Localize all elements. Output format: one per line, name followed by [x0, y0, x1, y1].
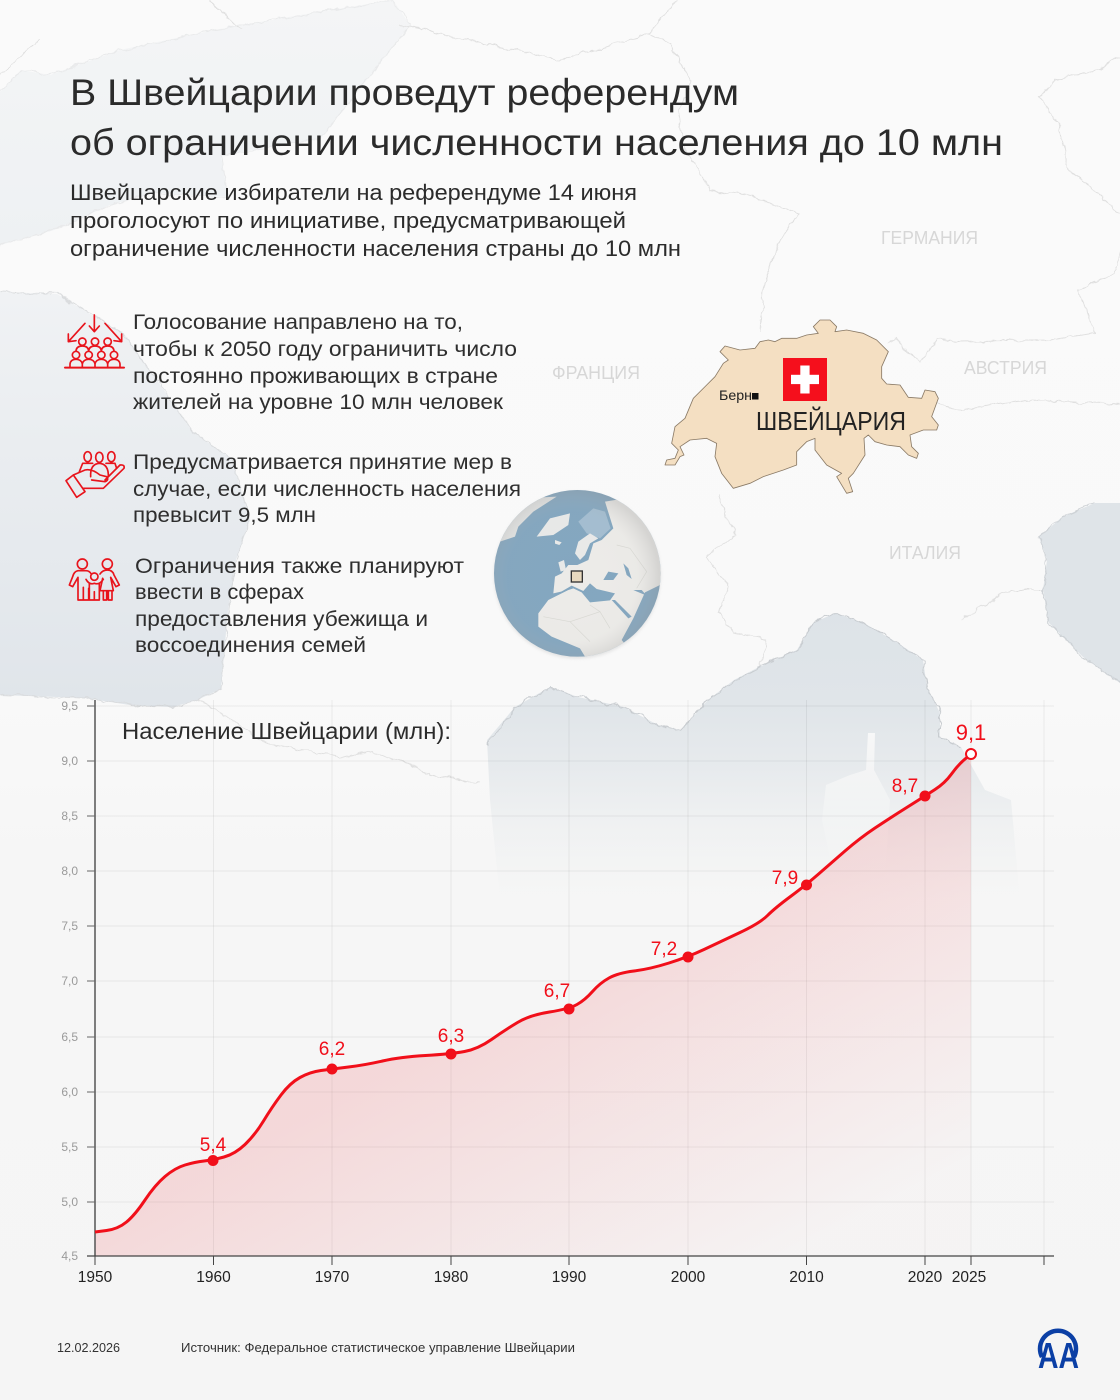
text: goal 2050 — [133, 310, 517, 414]
data labels: 6,2 — [319, 1039, 345, 1060]
data labels: 7,2 — [651, 939, 677, 960]
locator square — [571, 571, 582, 582]
y axis: 6,0 — [61, 1085, 78, 1099]
x axis: 2010 — [789, 1269, 824, 1286]
y axis: 9,5 — [61, 699, 78, 713]
text: goal 2050: постоянно проживающих в стране — [133, 364, 498, 388]
x axis — [78, 1256, 1054, 1286]
icon: hand holding people — [66, 452, 124, 497]
text: measures above 9.5 million: Предусматривается принятие мер в — [133, 450, 512, 474]
title: об ограничении численности населения до 10 млн — [70, 122, 1003, 163]
map: Switzerland — [665, 320, 938, 493]
map background — [0, 0, 1120, 900]
globe locator — [490, 485, 667, 662]
text: goal 2050: чтобы к 2050 году ограничить число — [133, 337, 517, 361]
data labels — [200, 720, 986, 1156]
label: France: ФРАНЦИЯ — [552, 363, 640, 383]
y axis: 8,5 — [61, 809, 78, 823]
Switzerland outline — [665, 320, 938, 493]
text: measures above 9.5 million: случае, если численность населения — [133, 477, 521, 501]
flag of Switzerland — [783, 358, 827, 401]
text: asylum and family reunification — [135, 554, 464, 657]
logo: Anadolu Agency: AA — [1038, 1335, 1079, 1376]
subtitle: Швейцарские избиратели на референдуме 14 июня — [70, 180, 637, 205]
date: 12.02.2026 — [57, 1340, 120, 1355]
text: asylum and family reunification: ввести в сферах — [135, 580, 304, 604]
text: goal 2050: жителей на уровне 10 млн человек — [133, 390, 504, 414]
area under the curve — [95, 754, 971, 1256]
y axis: 7,5 — [61, 919, 78, 933]
data labels: 6,7 — [544, 981, 570, 1002]
label: Italy: ИТАЛИЯ — [889, 543, 961, 563]
x axis: 1980 — [434, 1269, 469, 1286]
title: В Швейцарии проведут референдум — [70, 72, 739, 113]
data points — [208, 749, 976, 1166]
data labels: 9,1 — [956, 720, 986, 745]
text: asylum and family reunification: Ограничения также планируют — [135, 554, 464, 578]
x axis: 1970 — [315, 1269, 350, 1286]
chart: population of Switzerland — [61, 699, 1054, 1286]
y axis: 8,0 — [61, 864, 78, 878]
source: Источник: Федеральное статистическое управление Швейцарии — [181, 1340, 575, 1355]
text: asylum and family reunification: предоставления убежища и — [135, 607, 428, 631]
grid lines — [95, 700, 1054, 1256]
country name: ШВЕЙЦАРИЯ — [756, 406, 906, 436]
data labels: 7,9 — [772, 868, 798, 889]
text: measures above 9.5 million — [133, 450, 521, 527]
subtitle: проголосуют по инициативе, предусматривающей — [70, 208, 626, 233]
data labels: 5,4 — [200, 1135, 227, 1156]
x axis: 1990 — [552, 1269, 587, 1286]
y axis: 9,0 — [61, 754, 78, 768]
data labels: 6,3 — [438, 1026, 464, 1047]
icon: crowd with arrows — [65, 315, 124, 368]
capital: Bern: Берн — [719, 388, 752, 403]
text: goal 2050: Голосование направлено на то, — [133, 310, 463, 334]
title — [70, 72, 1003, 163]
x axis: 2000 — [671, 1269, 706, 1286]
y axis: 6,5 — [61, 1030, 78, 1044]
subtitle — [70, 180, 681, 261]
x axis: 1960 — [196, 1269, 231, 1286]
text: measures above 9.5 million: превысит 9,5 млн — [133, 503, 316, 527]
subtitle: ограничение численности населения страны до 10 млн — [70, 236, 681, 261]
label: Austria: АВСТРИЯ — [964, 358, 1047, 378]
y axis: 5,5 — [61, 1140, 78, 1154]
y axis — [61, 699, 95, 1263]
x axis: 2025 — [952, 1269, 986, 1286]
text: asylum and family reunification: воссоединения семей — [135, 633, 366, 657]
icon: family — [69, 559, 119, 600]
chart title: Население Швейцарии (млн): — [122, 718, 451, 744]
y axis: 7,0 — [61, 974, 78, 988]
population line — [95, 754, 971, 1232]
data labels: 8,7 — [892, 776, 918, 797]
x axis: 1950 — [78, 1269, 113, 1286]
x axis: 2020 — [908, 1269, 943, 1286]
y axis: 4,5 — [61, 1249, 78, 1263]
y axis: 5,0 — [61, 1195, 78, 1209]
label: Germany: ГЕРМАНИЯ — [881, 228, 978, 248]
